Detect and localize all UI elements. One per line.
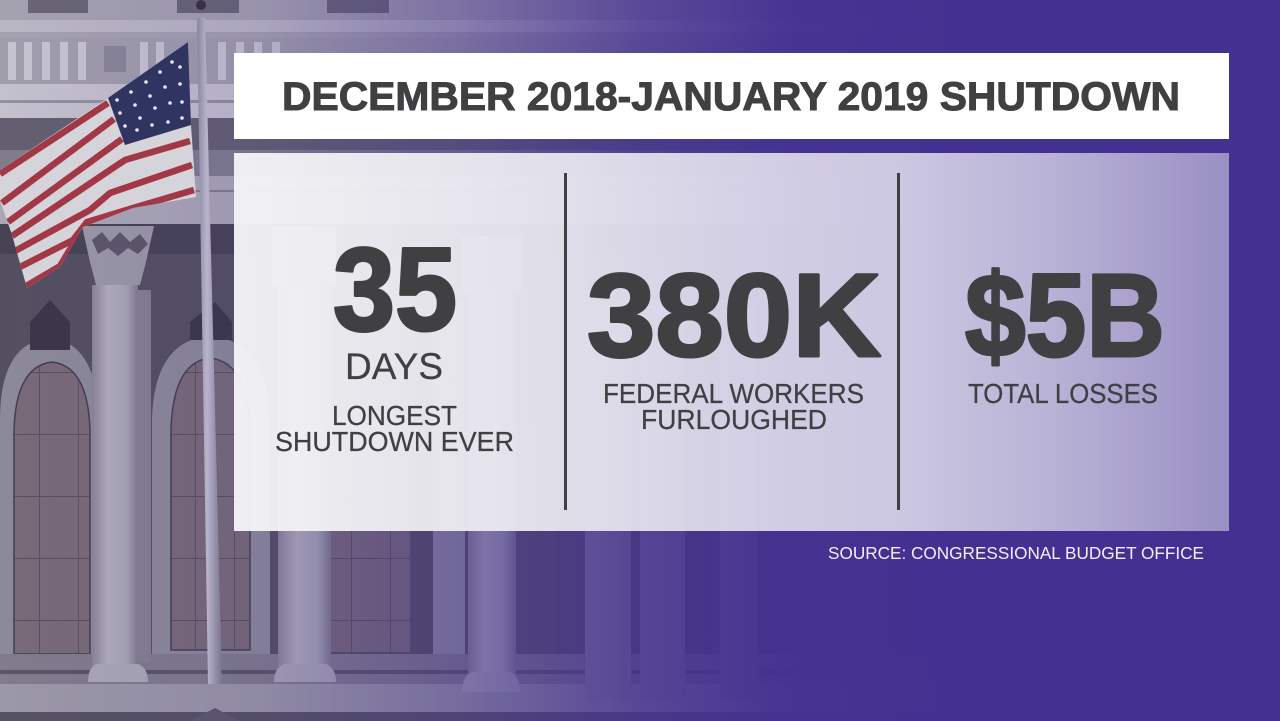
title: DECEMBER 2018-JANUARY 2019 SHUTDOWN <box>282 75 1180 119</box>
stat: 35 days: SHUTDOWN EVER <box>275 426 514 457</box>
divider <box>897 173 900 510</box>
building: window crests <box>30 300 232 350</box>
stat: 380K furloughed: FEDERAL WORKERS <box>603 378 864 409</box>
stat: 35 days: DAYS <box>345 346 443 387</box>
icon: american flag <box>0 42 196 288</box>
flag stripes <box>0 103 194 286</box>
stat: 35 days: 35 <box>333 224 457 356</box>
divider <box>564 173 567 510</box>
stat: 35 days <box>275 224 514 457</box>
panel: statistics <box>234 153 1229 531</box>
building: base ledges <box>0 654 1000 721</box>
flagpole <box>190 0 240 721</box>
stat: 380K furloughed: FURLOUGHED <box>641 404 827 435</box>
source note: SOURCE: CONGRESSIONAL BUDGET OFFICE <box>828 543 1204 563</box>
stat: 380K furloughed <box>587 250 881 435</box>
stat: $5B losses: TOTAL LOSSES <box>968 378 1158 409</box>
building: columns <box>82 226 758 700</box>
flag canton with stars <box>108 42 191 145</box>
title banner <box>234 53 1229 139</box>
stat: 35 days: LONGEST <box>332 400 457 431</box>
stat: 380K furloughed: 380K <box>587 250 881 382</box>
stat: $5B losses: $5B <box>965 250 1165 382</box>
building: arched windows <box>0 300 557 690</box>
building: upper dome drum <box>0 0 1000 654</box>
